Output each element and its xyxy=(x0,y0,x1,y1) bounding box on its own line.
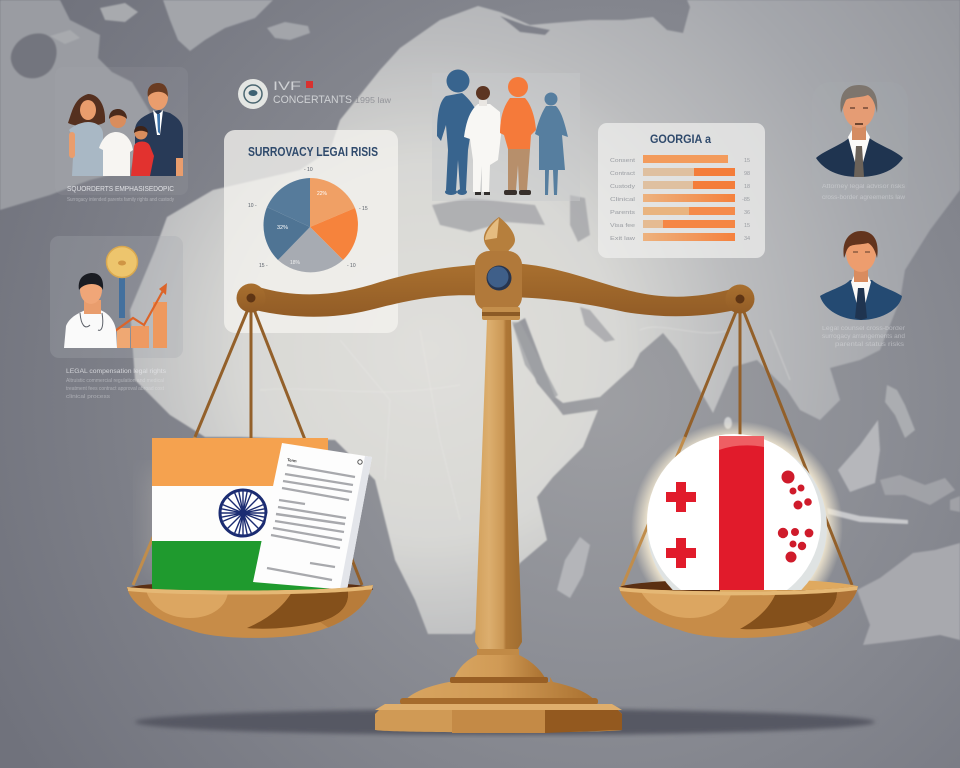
bar chart rows: -85 xyxy=(742,197,750,203)
pan interior: left xyxy=(127,581,373,597)
left scale pan with india flag and document xyxy=(120,302,380,645)
pan: right xyxy=(619,586,858,638)
right scale pan with georgia flag xyxy=(619,312,858,638)
pie chart xyxy=(263,178,358,272)
bar chart rows: Parents xyxy=(610,210,635,216)
caption: family xyxy=(67,186,174,203)
logo text: CONCERTANTS xyxy=(273,94,352,106)
panel: surrogacy legal risks xyxy=(224,130,398,333)
chains: right pan xyxy=(622,302,852,587)
caption: costs: treatment fees contract approval abroad cost xyxy=(66,386,164,392)
logo: organisation mark xyxy=(238,79,391,109)
bar chart rows: Contract xyxy=(610,171,636,177)
pie chart: 32% xyxy=(277,225,288,231)
map: inland seas xyxy=(432,195,615,400)
base xyxy=(375,649,622,733)
pie labels xyxy=(248,167,368,269)
pie labels: - 10 xyxy=(347,263,356,269)
map: north america xyxy=(0,0,150,210)
caption: costs: clinical process xyxy=(66,394,110,400)
icon: legal document: Term xyxy=(287,457,297,464)
map: white sea xyxy=(500,16,550,35)
pie chart: 22% xyxy=(317,191,328,197)
icon: orange figure xyxy=(500,77,536,195)
icon: india flag xyxy=(152,438,328,596)
pie labels: - 15 xyxy=(359,206,368,212)
pan: left xyxy=(127,585,373,638)
map: iceland xyxy=(267,22,310,40)
map: australia xyxy=(857,543,960,645)
bar chart rows: Exit law xyxy=(610,236,635,242)
logo text: IVF xyxy=(273,79,301,93)
portrait: young lawyer xyxy=(820,231,902,320)
caption: costs: Altruistic commercial regulation and medical xyxy=(66,378,164,384)
icon: small child in red xyxy=(131,126,154,176)
map: sri lanka xyxy=(724,417,732,429)
scale stand xyxy=(236,217,754,733)
caption: costs: LEGAL compensation legal rights xyxy=(66,368,167,375)
caption: senior lawyer: cross-border agreements law xyxy=(822,195,906,201)
glow behind flags xyxy=(150,421,843,633)
panel: people group xyxy=(432,70,580,201)
bar chart rows: Clinical xyxy=(610,197,635,203)
caption: young lawyer: Legal counsel cross-border xyxy=(822,326,905,332)
panel: georgia bar chart xyxy=(598,123,765,258)
bar chart: rising cost xyxy=(84,283,167,348)
central hub xyxy=(475,251,522,311)
caption: costs xyxy=(66,368,167,400)
pie labels: 15 - xyxy=(259,263,268,269)
bar chart rows: 98 xyxy=(744,171,750,177)
column xyxy=(475,320,522,652)
caption: senior lawyer xyxy=(822,184,906,201)
icon: mother xyxy=(68,94,105,176)
finial xyxy=(484,217,515,254)
panel: family xyxy=(55,67,188,203)
caption: young lawyer xyxy=(822,326,905,348)
beam xyxy=(236,263,754,317)
bar chart rows: 15 xyxy=(744,223,750,229)
map: greenland xyxy=(163,0,273,51)
icon: coin on post xyxy=(106,246,138,318)
bar chart rows xyxy=(610,155,750,242)
icon: georgia flag disc xyxy=(647,434,827,590)
pie chart: 18% xyxy=(290,260,301,266)
caption: family: SQUORDERTS EMPHASISEDOPIC xyxy=(67,186,174,193)
icon: navy figure xyxy=(437,70,477,195)
bar chart rows: 34 xyxy=(744,236,750,242)
pie labels: 10 - xyxy=(248,203,257,209)
bar chart rows: 15 xyxy=(744,158,750,164)
bar chart rows: Custody xyxy=(610,184,635,190)
caption: family: Surrogacy intended parents family rights and custody xyxy=(67,197,174,203)
bar chart rows: 36 xyxy=(744,210,750,216)
map: indonesia strip xyxy=(827,508,908,524)
logo text xyxy=(273,79,391,106)
map: madagascar xyxy=(557,537,590,598)
panel: doctor and cost chart xyxy=(50,236,183,400)
chains: left pan xyxy=(133,302,362,585)
icon: blue-grey figure xyxy=(535,92,568,195)
icon: doctor xyxy=(64,273,117,348)
map: arctic islands xyxy=(50,3,138,44)
pan interior: right xyxy=(620,580,720,595)
bar chart rows: Consent xyxy=(610,158,636,164)
icon: legal document xyxy=(253,443,372,590)
map: hudson bay xyxy=(11,33,57,78)
pie labels: - 10 xyxy=(304,167,313,173)
heading: surrogacy legal risks: SURROVACY LEGAI RISIS xyxy=(248,145,378,159)
map: philippines and islands xyxy=(880,385,960,512)
icon: child in white xyxy=(99,109,133,176)
bar chart rows: 18 xyxy=(744,184,750,190)
map: eurasia and africa xyxy=(130,0,960,634)
shadow under scale xyxy=(135,709,875,735)
caption: young lawyer: surrogacy arrangements and xyxy=(822,334,905,340)
icon: father xyxy=(135,83,183,176)
pivot bolt xyxy=(486,266,512,290)
map: country borders xyxy=(260,327,790,520)
bar chart rows: Visa fee xyxy=(610,223,635,229)
icon: doctor in white xyxy=(464,86,501,195)
caption: senior lawyer: Attorney legal advisor risks xyxy=(822,184,905,190)
map: borneo xyxy=(838,420,880,492)
portrait: senior lawyer xyxy=(812,82,908,200)
heading: georgia: GOORGIA a xyxy=(650,134,712,146)
caption: young lawyer: parental status risks xyxy=(835,342,904,348)
logo text: 1995 law xyxy=(355,96,391,105)
